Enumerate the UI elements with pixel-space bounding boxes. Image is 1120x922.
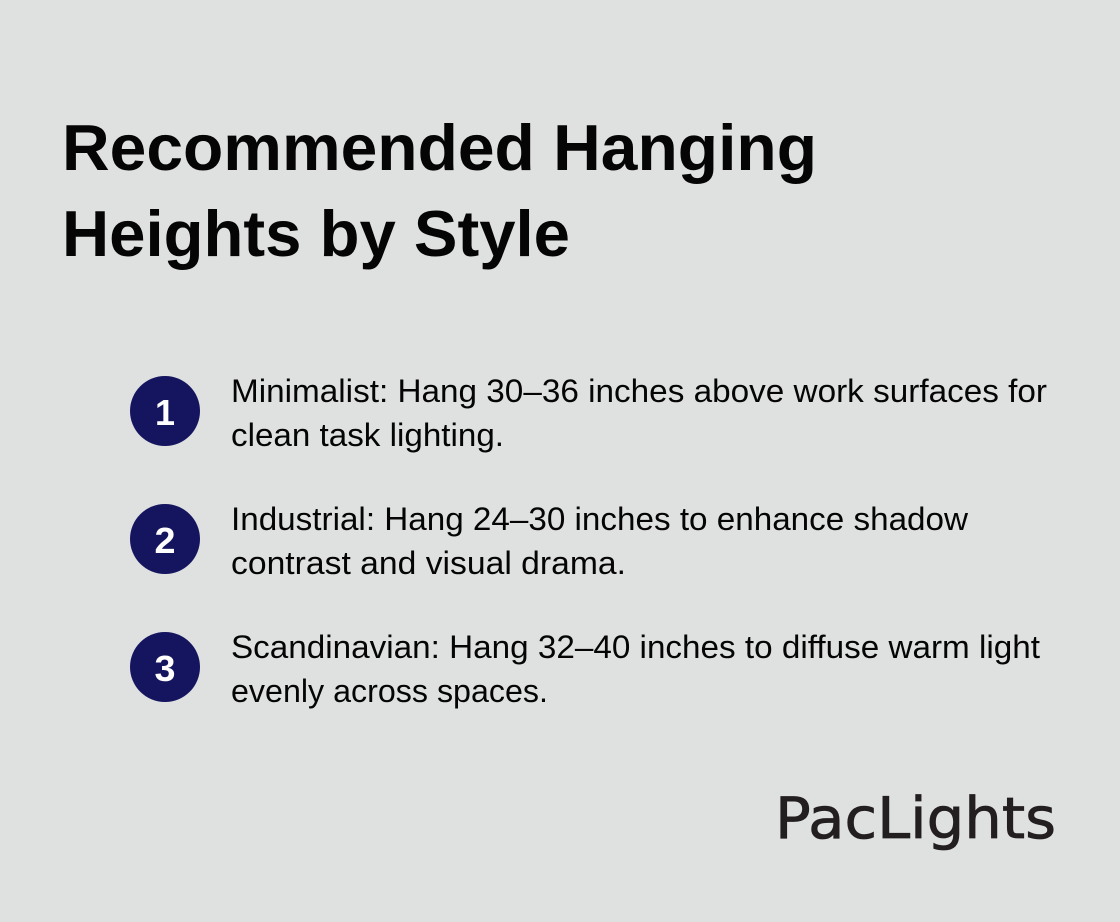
number badge 2 — [130, 504, 200, 574]
text: scandinavian: Scandinavian: Hang 32–40 inches to diffuse warm light — [231, 629, 1040, 665]
text: scandinavian: evenly across spaces. — [231, 673, 548, 709]
list item 1: minimalist — [130, 373, 1047, 453]
list item 3: scandinavian — [130, 629, 1040, 709]
text: industrial — [231, 501, 969, 581]
number badge 3 — [130, 632, 200, 702]
logo: PacLights: PacLights — [775, 786, 1056, 852]
title: Recommended Hanging — [62, 111, 817, 184]
text: minimalist — [231, 373, 1047, 453]
text: minimalist: Minimalist: Hang 30–36 inches above work surfaces for — [231, 373, 1047, 409]
list item 2: industrial — [130, 501, 969, 581]
number badge 3: 3 — [154, 648, 176, 689]
title: Heights by Style — [62, 197, 570, 270]
text: industrial: Industrial: Hang 24–30 inches to enhance shadow — [231, 501, 969, 537]
text: industrial: contrast and visual drama. — [231, 545, 626, 581]
text: minimalist: clean task lighting. — [231, 417, 504, 453]
title — [62, 111, 817, 270]
text: scandinavian — [231, 629, 1040, 709]
number badge 1 — [130, 376, 200, 446]
number badge 1: 1 — [155, 392, 175, 433]
number badge 2: 2 — [154, 520, 176, 561]
